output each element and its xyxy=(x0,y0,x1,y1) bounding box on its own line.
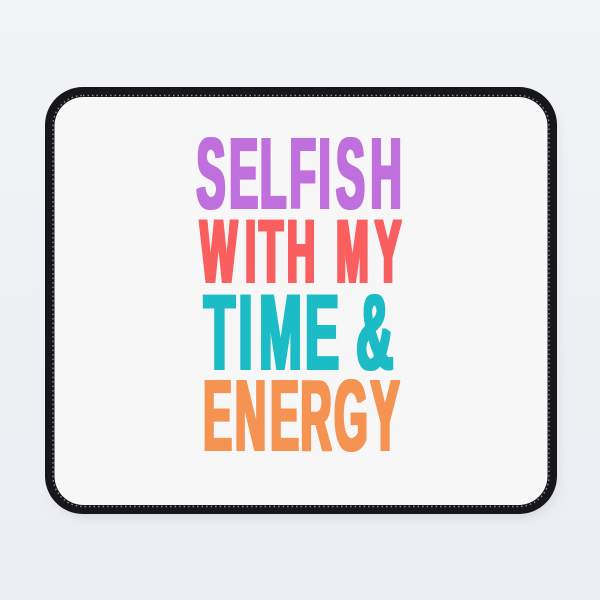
line: TIME &: TIME & xyxy=(204,272,393,392)
slogan xyxy=(197,118,402,472)
line: SELFISH: SELFISH xyxy=(197,118,402,230)
line: WITH MY: WITH MY xyxy=(200,202,401,301)
pad black stitched border xyxy=(45,87,557,514)
pad shadow xyxy=(50,98,558,518)
pad white surface xyxy=(54,97,548,505)
stitching detail xyxy=(53,96,549,506)
line: ENERGY: ENERGY xyxy=(203,360,399,472)
mouse pad xyxy=(45,87,557,514)
